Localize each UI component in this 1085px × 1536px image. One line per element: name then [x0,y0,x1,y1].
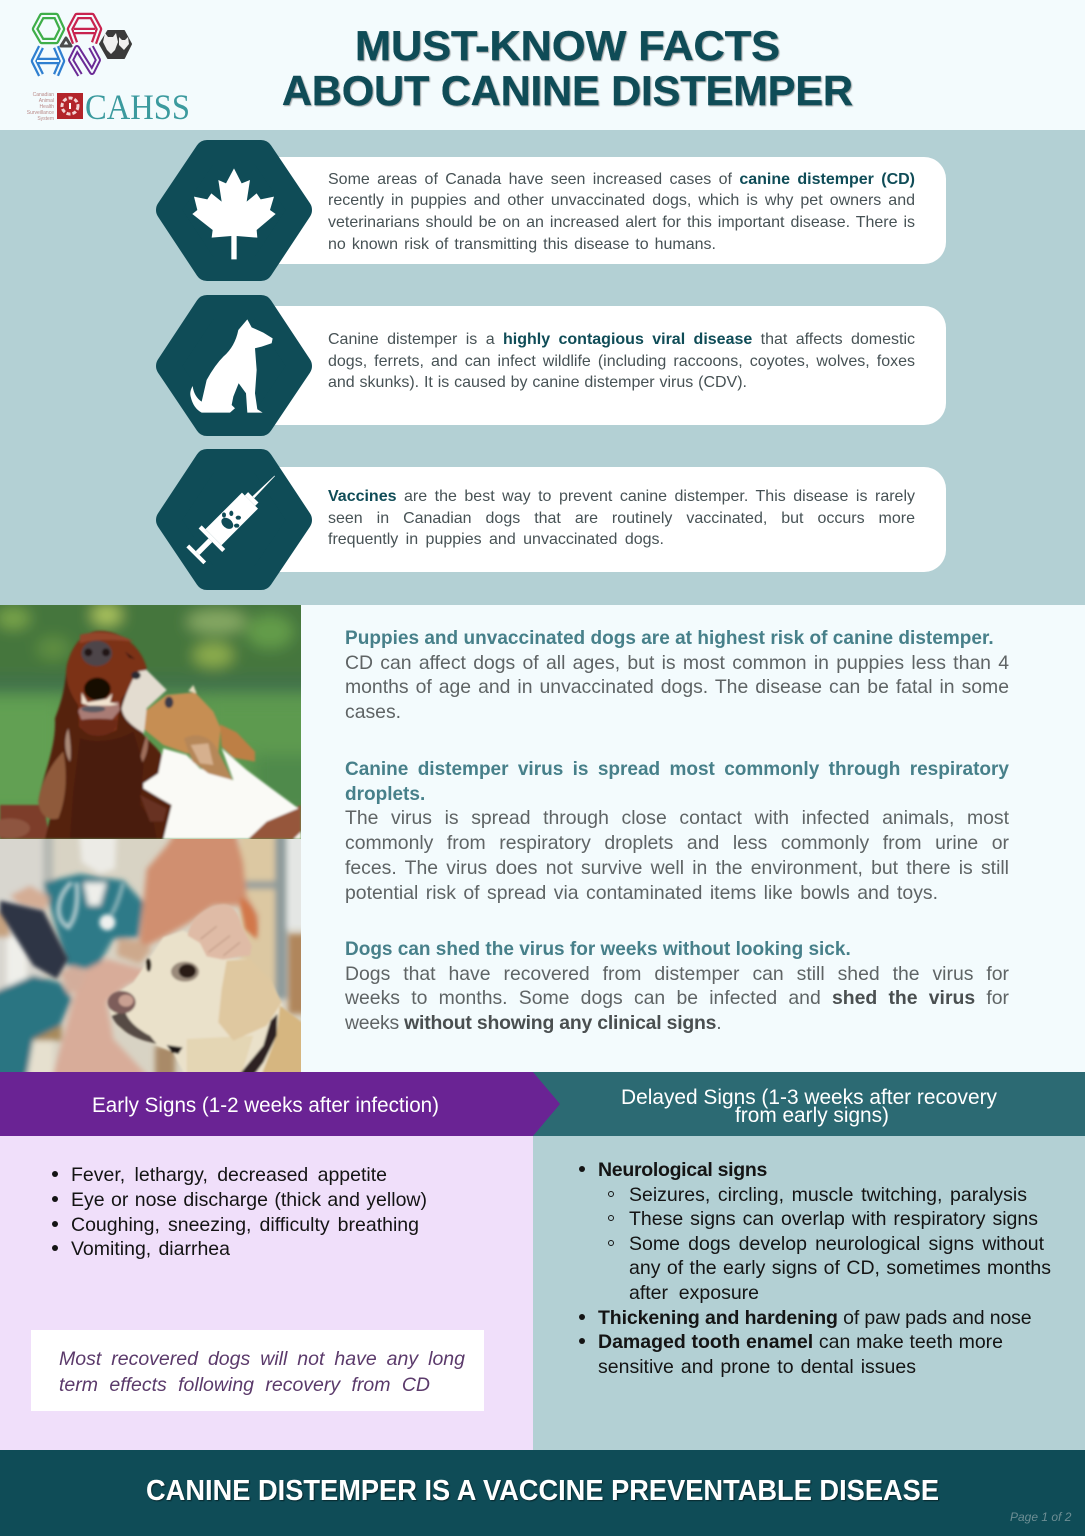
text: Vomiting, diarrhea [71,1238,230,1260]
text: Some dogs develop neurological signs without [629,1233,1044,1255]
text: and skunks). It is caused by canine distemper virus (CDV). [328,374,747,391]
card: recent cases [270,157,946,264]
callout: long term effects: Most recovered dogs will not have any long [59,1348,465,1370]
logo small text: Canadian [33,92,54,98]
text: commonly from respiratory droplets and less commonly from urine or [345,832,1009,854]
title [282,22,854,114]
text: any of the early signs of CD, sometimes months [629,1257,1051,1279]
text: Neurological signs [598,1159,767,1181]
text: weeks to months. Some dogs can be infected and shed the virus for [345,987,1009,1009]
text: no known risk of transmitting this disease to humans. [328,236,716,253]
icons: hexagon badges [156,140,312,590]
text: Canine distemper virus is spread most commonly through respiratory [345,759,1009,780]
logo small text: Surveillance [27,110,54,116]
text: Some areas of Canada have seen increased cases of canine distemper (CD) [328,171,915,188]
text: seen in Canadian dogs that are routinely vaccinated, but occurs more [328,510,915,527]
text: vaccines [328,488,915,548]
footer headline: CANINE DISTEMPER IS A VACCINE PREVENTABLE DISEASE [146,1475,939,1507]
callout: long term effects [31,1330,484,1411]
photo: vet and labrador [0,839,301,1072]
delayed signs heading [621,1086,997,1127]
icon: maple leaf [168,152,300,269]
text: Puppies and unvaccinated dogs are at highest risk of canine distemper. [345,628,994,649]
logo: CAHSS [27,87,190,127]
text: Vaccines are the best way to prevent canine distemper. This disease is rarely [328,488,915,505]
title: MUST-KNOW FACTS [355,22,780,69]
text: Dogs that have recovered from distemper can still shed the virus for [345,963,1009,985]
text: sensitive and prone to dental issues [598,1356,916,1378]
header: early signs arrow [0,1072,560,1136]
text: months of age and in unvaccinated dogs. The disease can be fatal in some [345,676,1009,698]
footer banner [0,1450,1085,1536]
text: Canine distemper is a highly contagious viral disease that affects domestic [328,331,915,348]
text: Coughing, sneezing, difficulty breathing [71,1214,419,1236]
text: Damaged tooth enamel can make teeth more [598,1331,1003,1353]
card: contagious [270,306,946,425]
header band [0,0,1085,130]
text: recent cases [328,171,915,253]
text: These signs can overlap with respiratory signs [629,1208,1038,1230]
text: Thickening and hardening of paw pads and nose [598,1307,1032,1329]
logo: OAHN hexagons [30,12,132,76]
logo red square [57,93,83,119]
list: early signs [52,1164,427,1260]
text: contagious disease [328,331,915,391]
text: veterinarians should be on an increased alert for this important disease. There is [328,214,915,231]
icon: sitting dog [168,307,300,424]
text: Seizures, circling, muscle twitching, paralysis [629,1184,1027,1206]
text: dogs, ferrets, and can infect wildlife (including raccoons, coyotes, wolves, foxes [328,353,915,370]
text: shedding [345,939,1009,1034]
text: potential risk of spread via contaminated items like bowls and toys. [345,882,938,904]
text: after exposure [629,1282,759,1304]
header: early signs arrow: Early Signs (1-2 weeks after infection) [92,1094,439,1117]
logo small text: System [37,116,54,122]
icon: syringe with paw [168,461,300,578]
panel: key facts band [0,130,1085,605]
text: CD can affect dogs of all ages, but is most common in puppies less than 4 [345,652,1009,674]
text: cases. [345,701,401,723]
text: Dogs can shed the virus for weeks without looking sick. [345,939,851,960]
photo: two dogs [0,605,301,839]
header: delayed signs [533,1072,1085,1136]
text: weeks without showing any clinical signs. [345,1012,721,1034]
text: Eye or nose discharge (thick and yellow) [71,1189,427,1211]
text: feces. The virus does not survive well in the environment, but there is still [345,857,1009,879]
logo small text: Animal [39,98,54,104]
callout: long term effects: term effects following recovery from CD [59,1374,430,1396]
delayed signs heading: from early signs) [735,1104,889,1127]
panel: early signs background [0,1136,533,1450]
panel: risk and spread text [345,628,1009,1034]
text: recently in puppies and other unvaccinated dogs, which is why pet owners and [328,192,915,209]
panel: delayed signs background [533,1136,1085,1450]
text: how it spreads [345,759,1009,904]
list: delayed signs [579,1159,1051,1378]
card: vaccines [270,467,946,572]
title: ABOUT CANINE DISTEMPER [282,67,853,114]
logo wordmark: CAHSS [85,87,190,127]
text: highest risk [345,628,1009,723]
logo small text [27,92,54,122]
page number: Page 1 of 2 [1010,1510,1071,1524]
logo small text: Health [40,104,54,110]
text: Fever, lethargy, decreased appetite [71,1164,387,1186]
text: droplets. [345,784,425,805]
text: The virus is spread through close contact with infected animals, most [345,807,1009,829]
text: frequently in puppies and unvaccinated dogs. [328,531,664,548]
delayed signs heading: Delayed Signs (1-3 weeks after recovery [621,1086,997,1109]
